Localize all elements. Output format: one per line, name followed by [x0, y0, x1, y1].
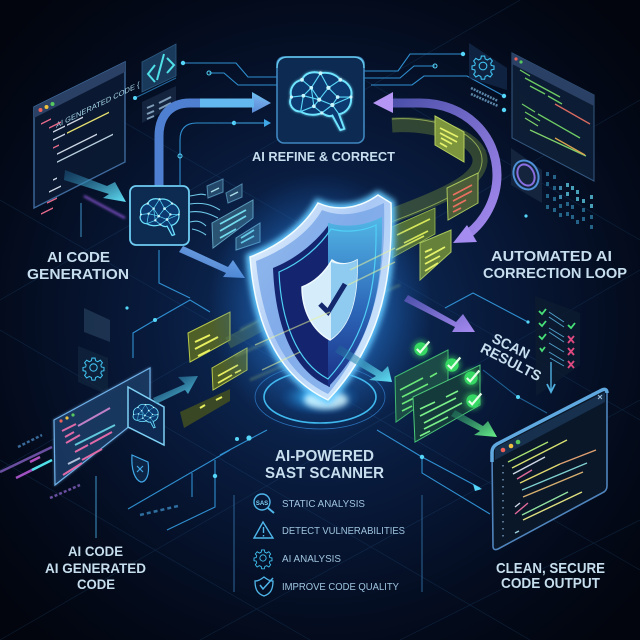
connectors from brain box to docs	[190, 194, 220, 235]
heading: AI generated code: AI CODE	[68, 543, 123, 559]
card: small panel	[142, 86, 176, 123]
heading: AI-powered SAST scanner: SAST SCANNER	[265, 465, 384, 482]
text: AI analysis: AI ANALYSIS	[282, 553, 341, 565]
code lines	[520, 70, 590, 156]
icon: brain	[290, 71, 352, 130]
code window: clean output	[492, 389, 607, 550]
red code doc	[447, 173, 478, 220]
window top edge	[492, 389, 607, 462]
code lines	[508, 440, 596, 533]
arrow: purple to scan results	[404, 295, 475, 332]
window dots	[38, 102, 54, 112]
arrow: purple correction loop	[373, 92, 497, 243]
code window: AI generated code	[34, 62, 140, 214]
card: ring gauge	[509, 148, 543, 203]
check marks	[539, 309, 575, 351]
icon: check mark	[320, 284, 345, 312]
shield inner line	[279, 225, 376, 379]
small code cards	[207, 179, 260, 250]
light streaks	[235, 275, 400, 380]
heading: clean secure output	[496, 560, 605, 592]
arrow: lower left to shield	[153, 376, 198, 404]
window title bar	[512, 53, 594, 106]
heading: AI generated code	[45, 543, 146, 592]
cross marks	[568, 336, 574, 368]
shield outer glow	[250, 195, 391, 400]
ribbon: correction loop	[340, 119, 482, 240]
vertical guide	[95, 476, 97, 538]
data streaks lower left	[0, 435, 178, 515]
heading: automated correction loop: CORRECTION LOOP	[483, 265, 627, 282]
heading: AI code generation: AI CODE	[47, 249, 110, 266]
ribbon: left of shield	[228, 305, 300, 343]
heading: AI generated code: AI GENERATED	[45, 560, 146, 576]
heading: AI-powered SAST scanner	[265, 448, 384, 482]
icon: gear card	[469, 43, 507, 106]
yellow code doc: left top	[188, 312, 230, 362]
heading: clean secure output: CODE OUTPUT	[501, 575, 600, 592]
code window: top right	[512, 53, 594, 181]
window title bar	[34, 62, 125, 118]
yellow code doc: left middle	[212, 348, 247, 390]
icon: shield check	[255, 577, 273, 596]
icon: static analysis: SAS	[256, 501, 268, 507]
icon: brain glow	[290, 71, 352, 130]
line numbers	[502, 465, 504, 540]
data streak: purple	[84, 196, 125, 218]
heading: clean secure output: CLEAN, SECURE	[496, 560, 605, 577]
heading: AI code generation: GENERATION	[27, 266, 129, 283]
icon: brain	[140, 198, 180, 235]
scan results panel	[535, 296, 580, 396]
small shield right half	[331, 260, 357, 339]
brain box: AI refine	[277, 57, 364, 143]
circuit nodes	[125, 52, 530, 491]
card: code tag icon	[142, 44, 176, 92]
panel: scanner features	[234, 494, 422, 596]
arrow: results to output	[547, 362, 555, 392]
shield glow	[208, 173, 432, 437]
shield inner right	[328, 217, 382, 387]
yellow code doc: right	[392, 208, 435, 258]
code lines	[62, 408, 115, 475]
heading: AI generated code: CODE	[77, 576, 115, 592]
icon: warning triangle	[254, 522, 273, 538]
shield rim	[250, 195, 391, 400]
circuit lines	[81, 54, 547, 530]
yellow code doc: left bottom	[180, 389, 230, 428]
streak overlay	[255, 248, 395, 370]
shield base rings	[255, 365, 385, 429]
arrow: shield to results	[335, 345, 392, 382]
code lines	[41, 88, 113, 214]
heading: automated correction loop	[483, 248, 627, 282]
code window: lower left	[54, 368, 150, 485]
window dots	[514, 57, 523, 64]
shield	[250, 195, 391, 400]
green code window: back	[395, 350, 448, 422]
arrow: brain to shield	[179, 246, 245, 278]
icon: static analysis	[254, 494, 274, 513]
icon: lower shield chip	[132, 455, 149, 482]
text: static analysis: STATIC ANALYSIS	[282, 498, 365, 510]
data matrix	[546, 172, 593, 229]
shield side face	[256, 203, 384, 394]
brain box: AI code generation	[130, 186, 189, 245]
window title bar	[495, 392, 605, 460]
heading: scan results: RESULTS	[478, 341, 544, 385]
small arrow	[234, 119, 271, 127]
result lines	[549, 312, 564, 366]
text: detect vulnerabilities: DETECT VULNERABILITIES	[282, 525, 405, 537]
arrow: AI code generation up to refine	[159, 92, 271, 186]
arrow: green to clean output	[451, 410, 497, 437]
window dots	[59, 413, 75, 423]
icon: brain	[133, 404, 159, 428]
check badges	[412, 340, 482, 410]
yellow code doc: lower right	[420, 230, 451, 280]
window close icon	[598, 395, 602, 399]
heading: AI-powered SAST scanner: AI-POWERED	[275, 448, 374, 465]
window dots	[501, 440, 520, 452]
green code window: front	[413, 365, 480, 442]
small shield	[302, 260, 357, 340]
icon: AI analysis	[254, 550, 272, 569]
shield inner left	[273, 223, 330, 387]
yellow code doc: top	[435, 116, 464, 162]
card: lower left brain	[128, 387, 164, 445]
heading: AI code generation	[27, 249, 129, 283]
lower left data panel	[84, 308, 110, 342]
code title: AI GENERATED CODE {	[56, 80, 140, 130]
text: improve code quality: IMPROVE CODE QUALITY	[282, 581, 399, 593]
heading: AI refine and correct: AI REFINE & CORRECT	[252, 150, 395, 164]
heading: automated correction loop: AUTOMATED AI	[491, 248, 612, 265]
card: lower left gear	[78, 346, 108, 395]
arrow: code to AI brain	[64, 170, 126, 202]
heading: scan results: SCAN	[489, 331, 532, 363]
